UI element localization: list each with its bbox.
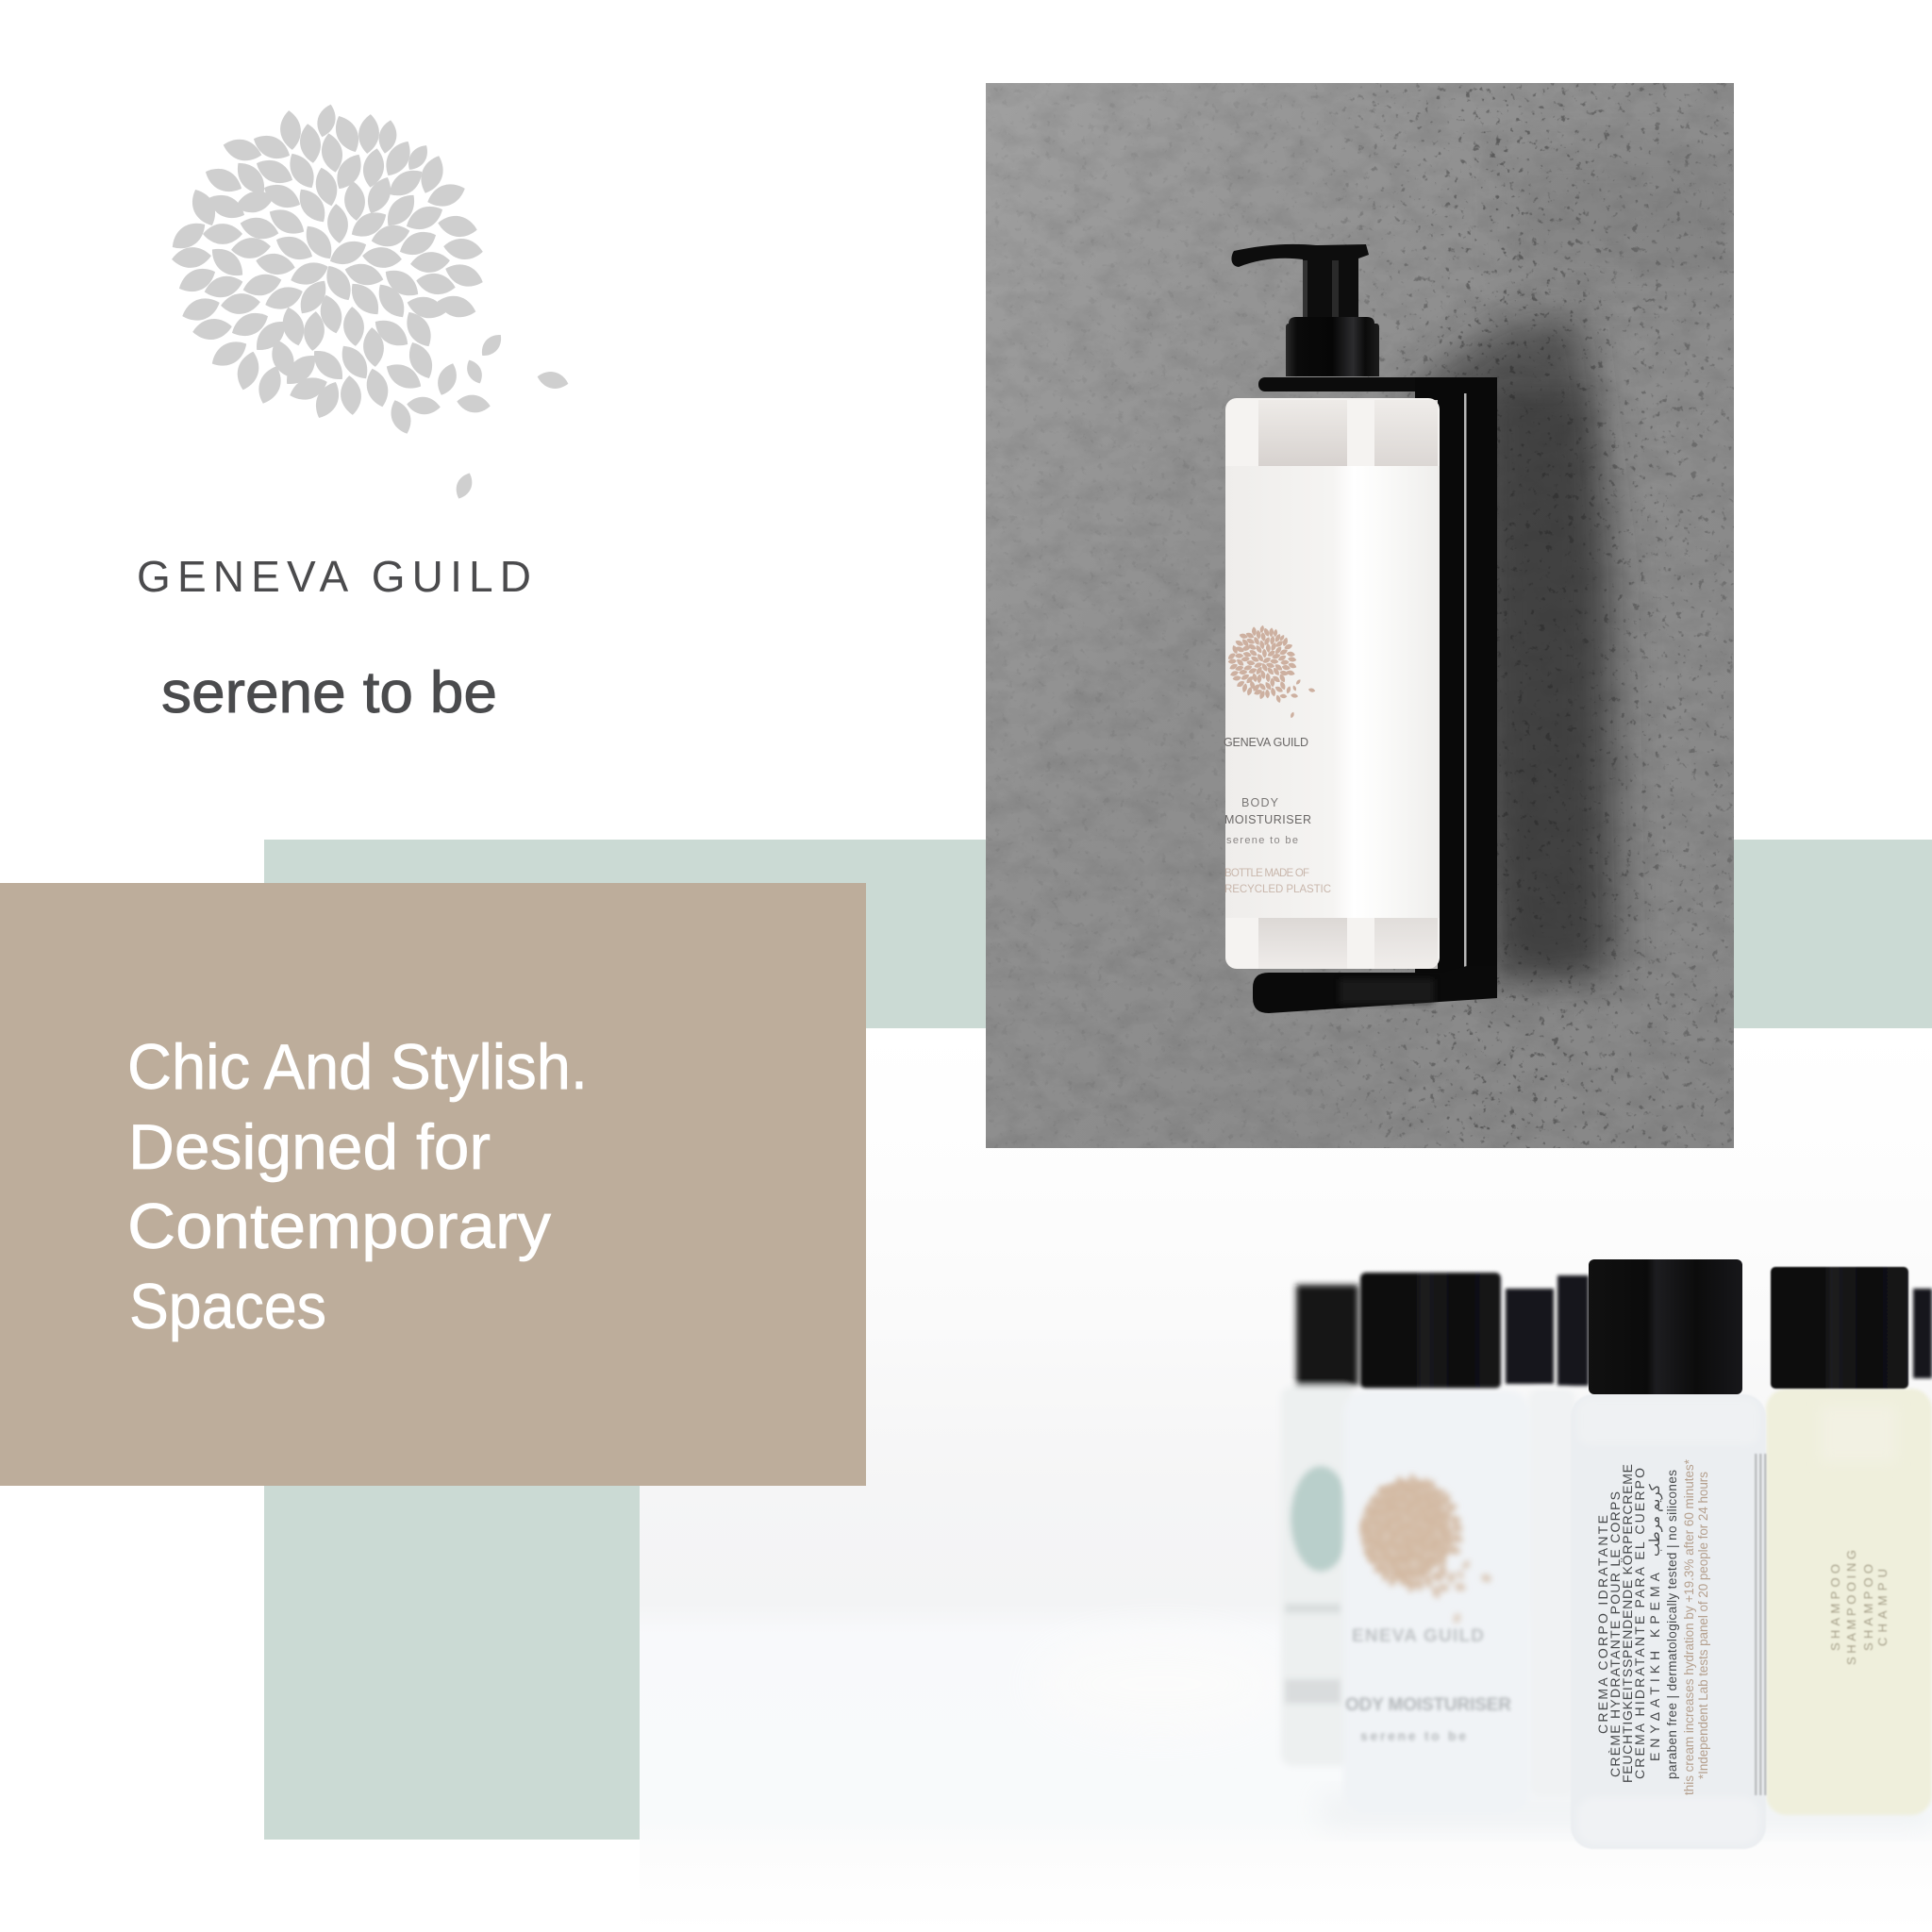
rotated product text: FEUCHTIGKEITSSPENDENDE KÖRPERCREME	[1619, 1464, 1635, 1783]
central clear bottle with rotated text	[1571, 1259, 1766, 1849]
label text: RECYCLED PLASTIC	[1224, 884, 1331, 895]
panel: pump bottle on concrete wall photo	[986, 83, 1734, 1148]
blurred shampoo label text: SHAMPOOING	[1844, 1550, 1858, 1665]
label text: serene to be	[1226, 835, 1298, 846]
label text: MOISTURISER	[1224, 813, 1311, 826]
blurred label text: serene to be	[1360, 1728, 1466, 1743]
tiny ingredient lines	[1755, 1454, 1766, 1795]
rotated product text: CREMA CORPO IDRATANTE	[1595, 1515, 1610, 1734]
label flower emblem	[1227, 625, 1316, 719]
headline text: Contemporary	[127, 1191, 551, 1262]
rotated product text: ΕΝΥΔΑΤΙΚΗ ΚΡΕΜΑ	[1647, 1572, 1662, 1761]
far left blurred bottle	[1281, 1285, 1358, 1766]
soft shadow under bottles	[1321, 1792, 1932, 1830]
blurred shampoo label text: SHAMPOO	[1828, 1564, 1842, 1651]
blurred label text: ENEVA GUILD	[1352, 1626, 1484, 1646]
headline text: Spaces	[129, 1271, 326, 1342]
shampoo bottle, cream	[1766, 1267, 1932, 1815]
moisturiser bottle, front label	[1343, 1273, 1530, 1813]
mint green lower block	[264, 1486, 640, 1840]
rotated product text: this cream increases hydration by +19.3% after 60 minutes*	[1682, 1458, 1696, 1795]
tagline: serene to be	[161, 660, 497, 725]
label text: GENEVA GUILD	[1224, 736, 1308, 749]
blurred shampoo label text: SHAMPOO	[1861, 1564, 1875, 1651]
headline text	[127, 1031, 588, 1342]
emblem	[1358, 1473, 1492, 1624]
headline text: Designed for	[128, 1111, 491, 1183]
pump head	[1231, 244, 1379, 376]
group: miniature bottles photo	[1281, 1259, 1932, 1849]
cast shadow on the wall	[1415, 151, 1734, 986]
blurred shampoo label text: CHAMPU	[1875, 1569, 1890, 1646]
concrete wall	[986, 83, 1734, 1148]
blurred caps behind	[1506, 1275, 1932, 1386]
label text: BODY	[1241, 796, 1279, 809]
mint green horizontal band	[264, 840, 1932, 1028]
rotated product text: CRÈME HYDRATANTE POUR LE CORPS	[1607, 1491, 1623, 1777]
wall bracket	[1253, 377, 1497, 1013]
label text	[1224, 736, 1331, 895]
rotated product text: كريم مرطب	[1647, 1483, 1663, 1557]
headline text: Chic And Stylish.	[127, 1031, 588, 1103]
rotated product text	[1595, 1458, 1710, 1795]
logo: grey petal flower	[167, 102, 570, 502]
lower blurred backdrop of the bottle photograph	[640, 1028, 1932, 1932]
rotated product text: CREMA HIDRATANTE PARA EL CUERPO	[1632, 1468, 1647, 1779]
panel: taupe headline block	[0, 883, 866, 1486]
rotated product text: paraben free | dermatologically tested | no silicones	[1665, 1470, 1679, 1779]
blurred shampoo label text	[1828, 1550, 1890, 1665]
label text: BOTTLE MADE OF	[1224, 868, 1309, 879]
bottle label	[1224, 466, 1440, 918]
blurred back bottle	[1528, 1389, 1575, 1797]
blurred label text: ODY MOISTURISER	[1345, 1695, 1511, 1715]
blurred label text	[1345, 1626, 1511, 1743]
rotated product text: *Independent Lab tests panel of 20 people for 24 hours	[1696, 1472, 1710, 1779]
bottle body	[1224, 398, 1440, 969]
brand name: GENEVA GUILD	[137, 552, 531, 601]
